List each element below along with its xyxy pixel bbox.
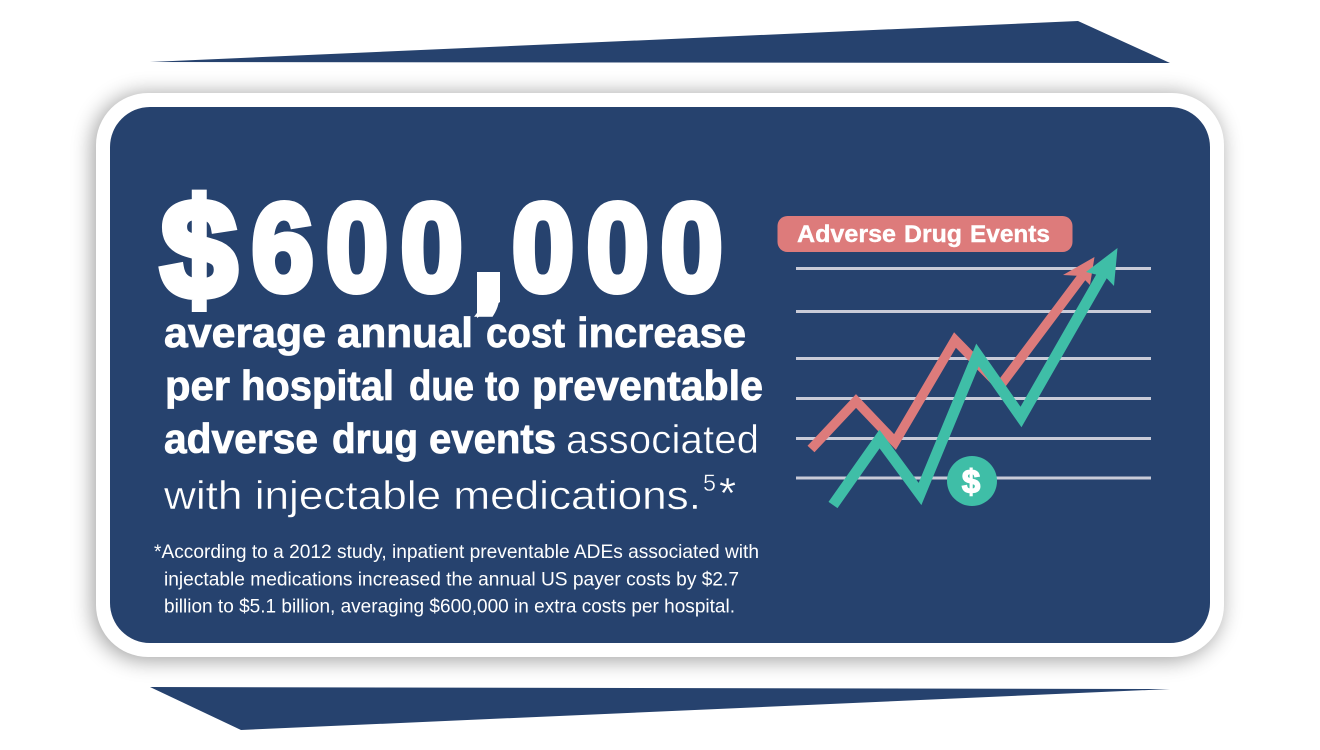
description text: annual: [337, 309, 473, 356]
chart label: Adverse Drug Events: Drug: [904, 221, 962, 248]
footnote: injectable medications increased the annual US payer costs by $2.7: [164, 568, 739, 590]
description text: preventable: [532, 362, 763, 409]
headline figure: $: [161, 172, 237, 328]
description text: drug: [332, 415, 418, 462]
description text: events: [429, 415, 556, 462]
description text: hospital: [241, 362, 394, 409]
icon: dollar coin: $: [962, 463, 980, 500]
chart label: Adverse Drug Events: [778, 216, 1072, 252]
panel: main card: [93, 93, 1224, 660]
footnote: [154, 541, 759, 618]
description text: [163, 309, 763, 518]
description text: associated: [566, 418, 759, 462]
line chart: [796, 248, 1151, 506]
description text: with injectable medications.: [163, 474, 701, 518]
description text: cost: [486, 309, 565, 356]
red trend arrow: [811, 257, 1094, 449]
description text: increase: [577, 309, 746, 356]
description text: to: [485, 362, 520, 409]
icon: dollar coin: [947, 456, 997, 506]
headline figure: 600,000: [252, 178, 723, 320]
description text: *: [719, 469, 736, 518]
chart label: Adverse Drug Events: Adverse: [797, 221, 896, 248]
description text: per: [165, 362, 230, 409]
description text: average: [164, 309, 326, 356]
description text: adverse: [164, 415, 318, 462]
bottom ribbon: [150, 687, 1170, 730]
description text: due: [409, 362, 474, 409]
description text: 5: [703, 470, 716, 497]
green trend arrow: [833, 248, 1118, 505]
footnote: *According to a 2012 study, inpatient preventable ADEs associated with: [154, 541, 759, 563]
chart label: Adverse Drug Events: Events: [970, 221, 1050, 248]
footnote: billion to $5.1 billion, averaging $600,000 in extra costs per hospital.: [164, 596, 735, 618]
top ribbon: [150, 21, 1170, 63]
